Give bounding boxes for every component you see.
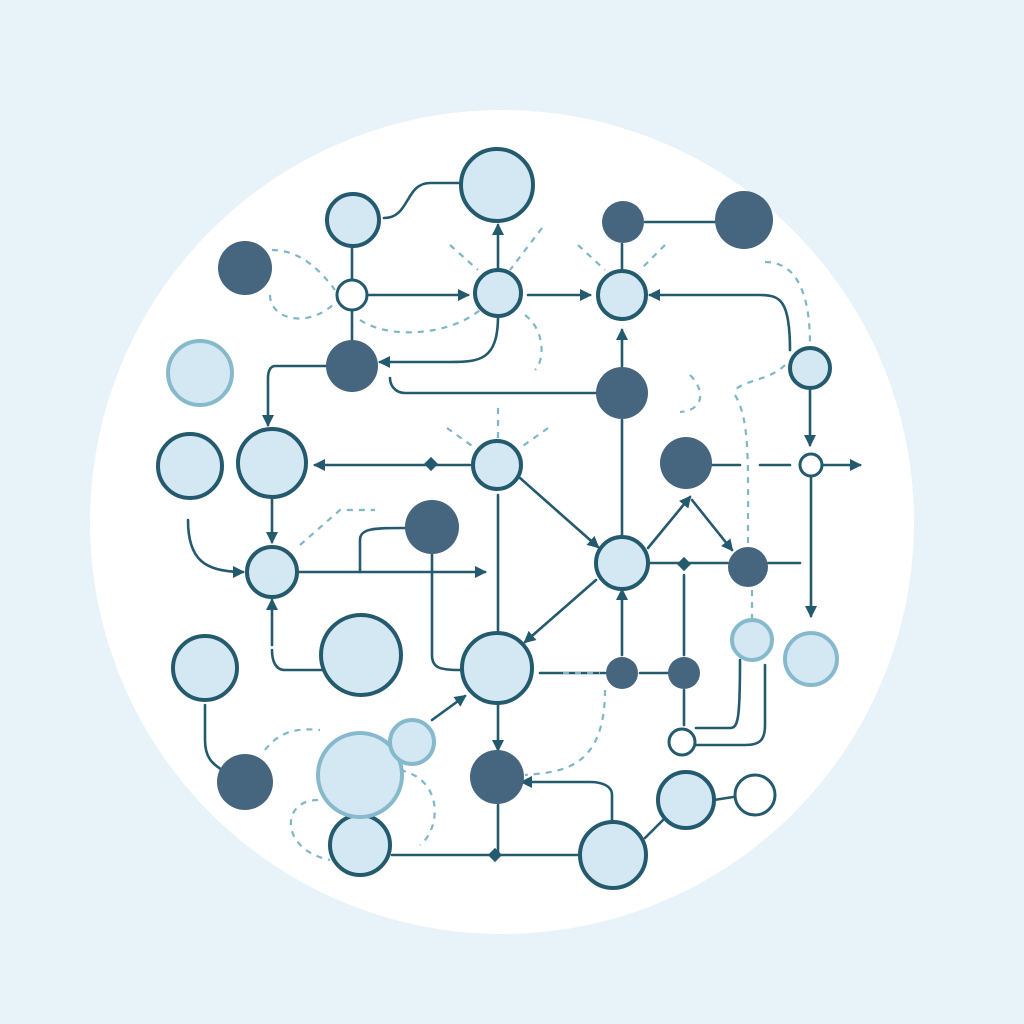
pale nodes (168, 341, 837, 817)
dark nodes (217, 191, 773, 810)
diamonds (424, 457, 691, 862)
light nodes (158, 149, 830, 888)
white circle background panel (90, 110, 914, 934)
edges (188, 183, 860, 855)
white small nodes (337, 280, 822, 815)
dashed light edges (265, 228, 810, 860)
